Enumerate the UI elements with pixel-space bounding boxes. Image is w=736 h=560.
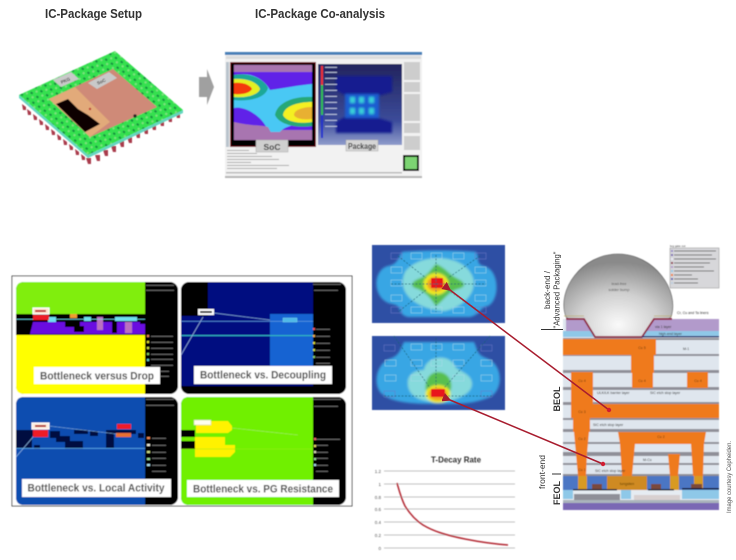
axis labels: 0.8 [375, 495, 381, 500]
package pins [22, 104, 180, 164]
Cu labels: Cu 3 [578, 410, 586, 414]
legend [313, 399, 341, 472]
Cu labels: Cu 2 [578, 437, 586, 441]
PKG label [53, 72, 79, 87]
label: back-end / Advanced Packaging: "Advanced Packaging" [552, 252, 562, 328]
panel: Bottleneck vs. PG Resistance [181, 397, 346, 505]
legend [146, 399, 174, 472]
FEOL layer [563, 476, 719, 490]
caption: Bottleneck vs. Decoupling [200, 370, 326, 382]
console log [227, 150, 289, 169]
illustration: IC package 3D model [19, 51, 183, 164]
caption [194, 366, 332, 384]
panel: Bottleneck versus Drop [16, 282, 178, 394]
caption: Bottleneck vs. PG Resistance [193, 484, 333, 496]
legend: material key: leg gate cut [670, 244, 686, 248]
axis labels: 0.4 [375, 520, 381, 525]
caption [187, 480, 339, 497]
layer annotations: M-1 [683, 347, 689, 351]
solder bump [564, 254, 673, 337]
SoC label [88, 72, 117, 89]
layer annotations: ULK/LK barrier layer [597, 391, 630, 395]
SoC label: SoC [96, 77, 107, 86]
panel: Bottleneck vs. Local Activity [16, 397, 178, 505]
minimap [403, 155, 419, 171]
cross-section: chip interconnect stack: tungsten [620, 482, 634, 486]
label: BEOL: BEOL [552, 386, 562, 412]
transistors and substrate [563, 490, 719, 500]
Cu labels: Cu 1 [578, 468, 586, 472]
axis labels: 1.2 [375, 469, 381, 474]
Cu labels: Cu 4 [694, 379, 702, 383]
layer annotations [593, 311, 709, 473]
layer annotations: via 1 layer [655, 325, 672, 329]
black die region [56, 99, 100, 132]
caption [34, 367, 160, 384]
chart: T-Decay Rate [375, 454, 515, 551]
arrow: setup to analysis [199, 69, 214, 105]
layer annotations: M-Cu [643, 458, 652, 462]
arrow: top map to Cu 3 layer [450, 290, 611, 412]
BEOL grey dielectric bands [563, 338, 719, 476]
axis labels: 0.2 [375, 533, 381, 538]
layer annotations: SiC etch stop layer [650, 391, 681, 395]
screenshot: co-analysis tool window [225, 52, 422, 178]
SoC label [256, 140, 288, 152]
tool side panel [404, 62, 420, 150]
panel: bottleneck frame [12, 276, 352, 506]
legend [146, 285, 174, 377]
Cu labels: Cu 4 [578, 379, 586, 383]
decay curve [397, 483, 508, 545]
Package label: Package [348, 142, 376, 151]
passivation layers [566, 319, 719, 337]
solder bump: solder bump [609, 288, 629, 292]
thermal map: top decay pattern [372, 245, 505, 323]
arrow: bottom map to Cu 1 layer [450, 400, 605, 466]
caption: Bottleneck versus Drop [40, 370, 154, 382]
axis labels [375, 469, 381, 551]
axis labels: 0.6 [375, 507, 381, 512]
Cu labels [578, 346, 702, 472]
label: back-end / Advanced Packaging: back-end / [542, 270, 552, 309]
solder bump: lead-free [612, 282, 626, 286]
thermal map: bottom decay pattern [372, 336, 505, 410]
Cu labels: Cu 2 [657, 435, 665, 439]
SoC label: SoC [264, 142, 280, 152]
label: FEOL: FEOL [552, 480, 562, 505]
layer annotations: SiC etch stop layer [595, 469, 626, 473]
Cu labels: Cu 5 [638, 346, 646, 350]
Cu labels: Cu 4 [638, 379, 646, 383]
label: image courtesy: Image courtesy Cepheiden. [726, 441, 733, 513]
SoC heat map [230, 62, 316, 147]
chart title: T-Decay Rate [431, 454, 481, 464]
legend [313, 284, 341, 364]
copper interconnect [563, 339, 719, 476]
Package heat map [318, 64, 402, 145]
cross-section: chip interconnect stack [563, 254, 719, 510]
substrate board [19, 51, 183, 155]
caption: Bottleneck vs. Local Activity [28, 482, 165, 494]
axis labels: 1 [378, 482, 381, 487]
axis labels: 0 [378, 546, 381, 551]
layer annotations: Cr, Cu and Ta liners [677, 311, 709, 315]
title: IC-Package Setup: IC-Package Setup [45, 6, 142, 21]
label: front-end: front-end [537, 455, 547, 489]
legend: material key [670, 244, 719, 288]
layer annotations: SiC etch stop layer [593, 423, 624, 427]
PKG label: PKG [60, 76, 71, 85]
silicon die [49, 69, 157, 137]
panel: Bottleneck vs. Decoupling [181, 282, 346, 394]
layer annotations: high-end layer [659, 332, 683, 336]
caption [22, 479, 171, 497]
title: IC-Package Co-analysis: IC-Package Co-analysis [255, 6, 385, 21]
